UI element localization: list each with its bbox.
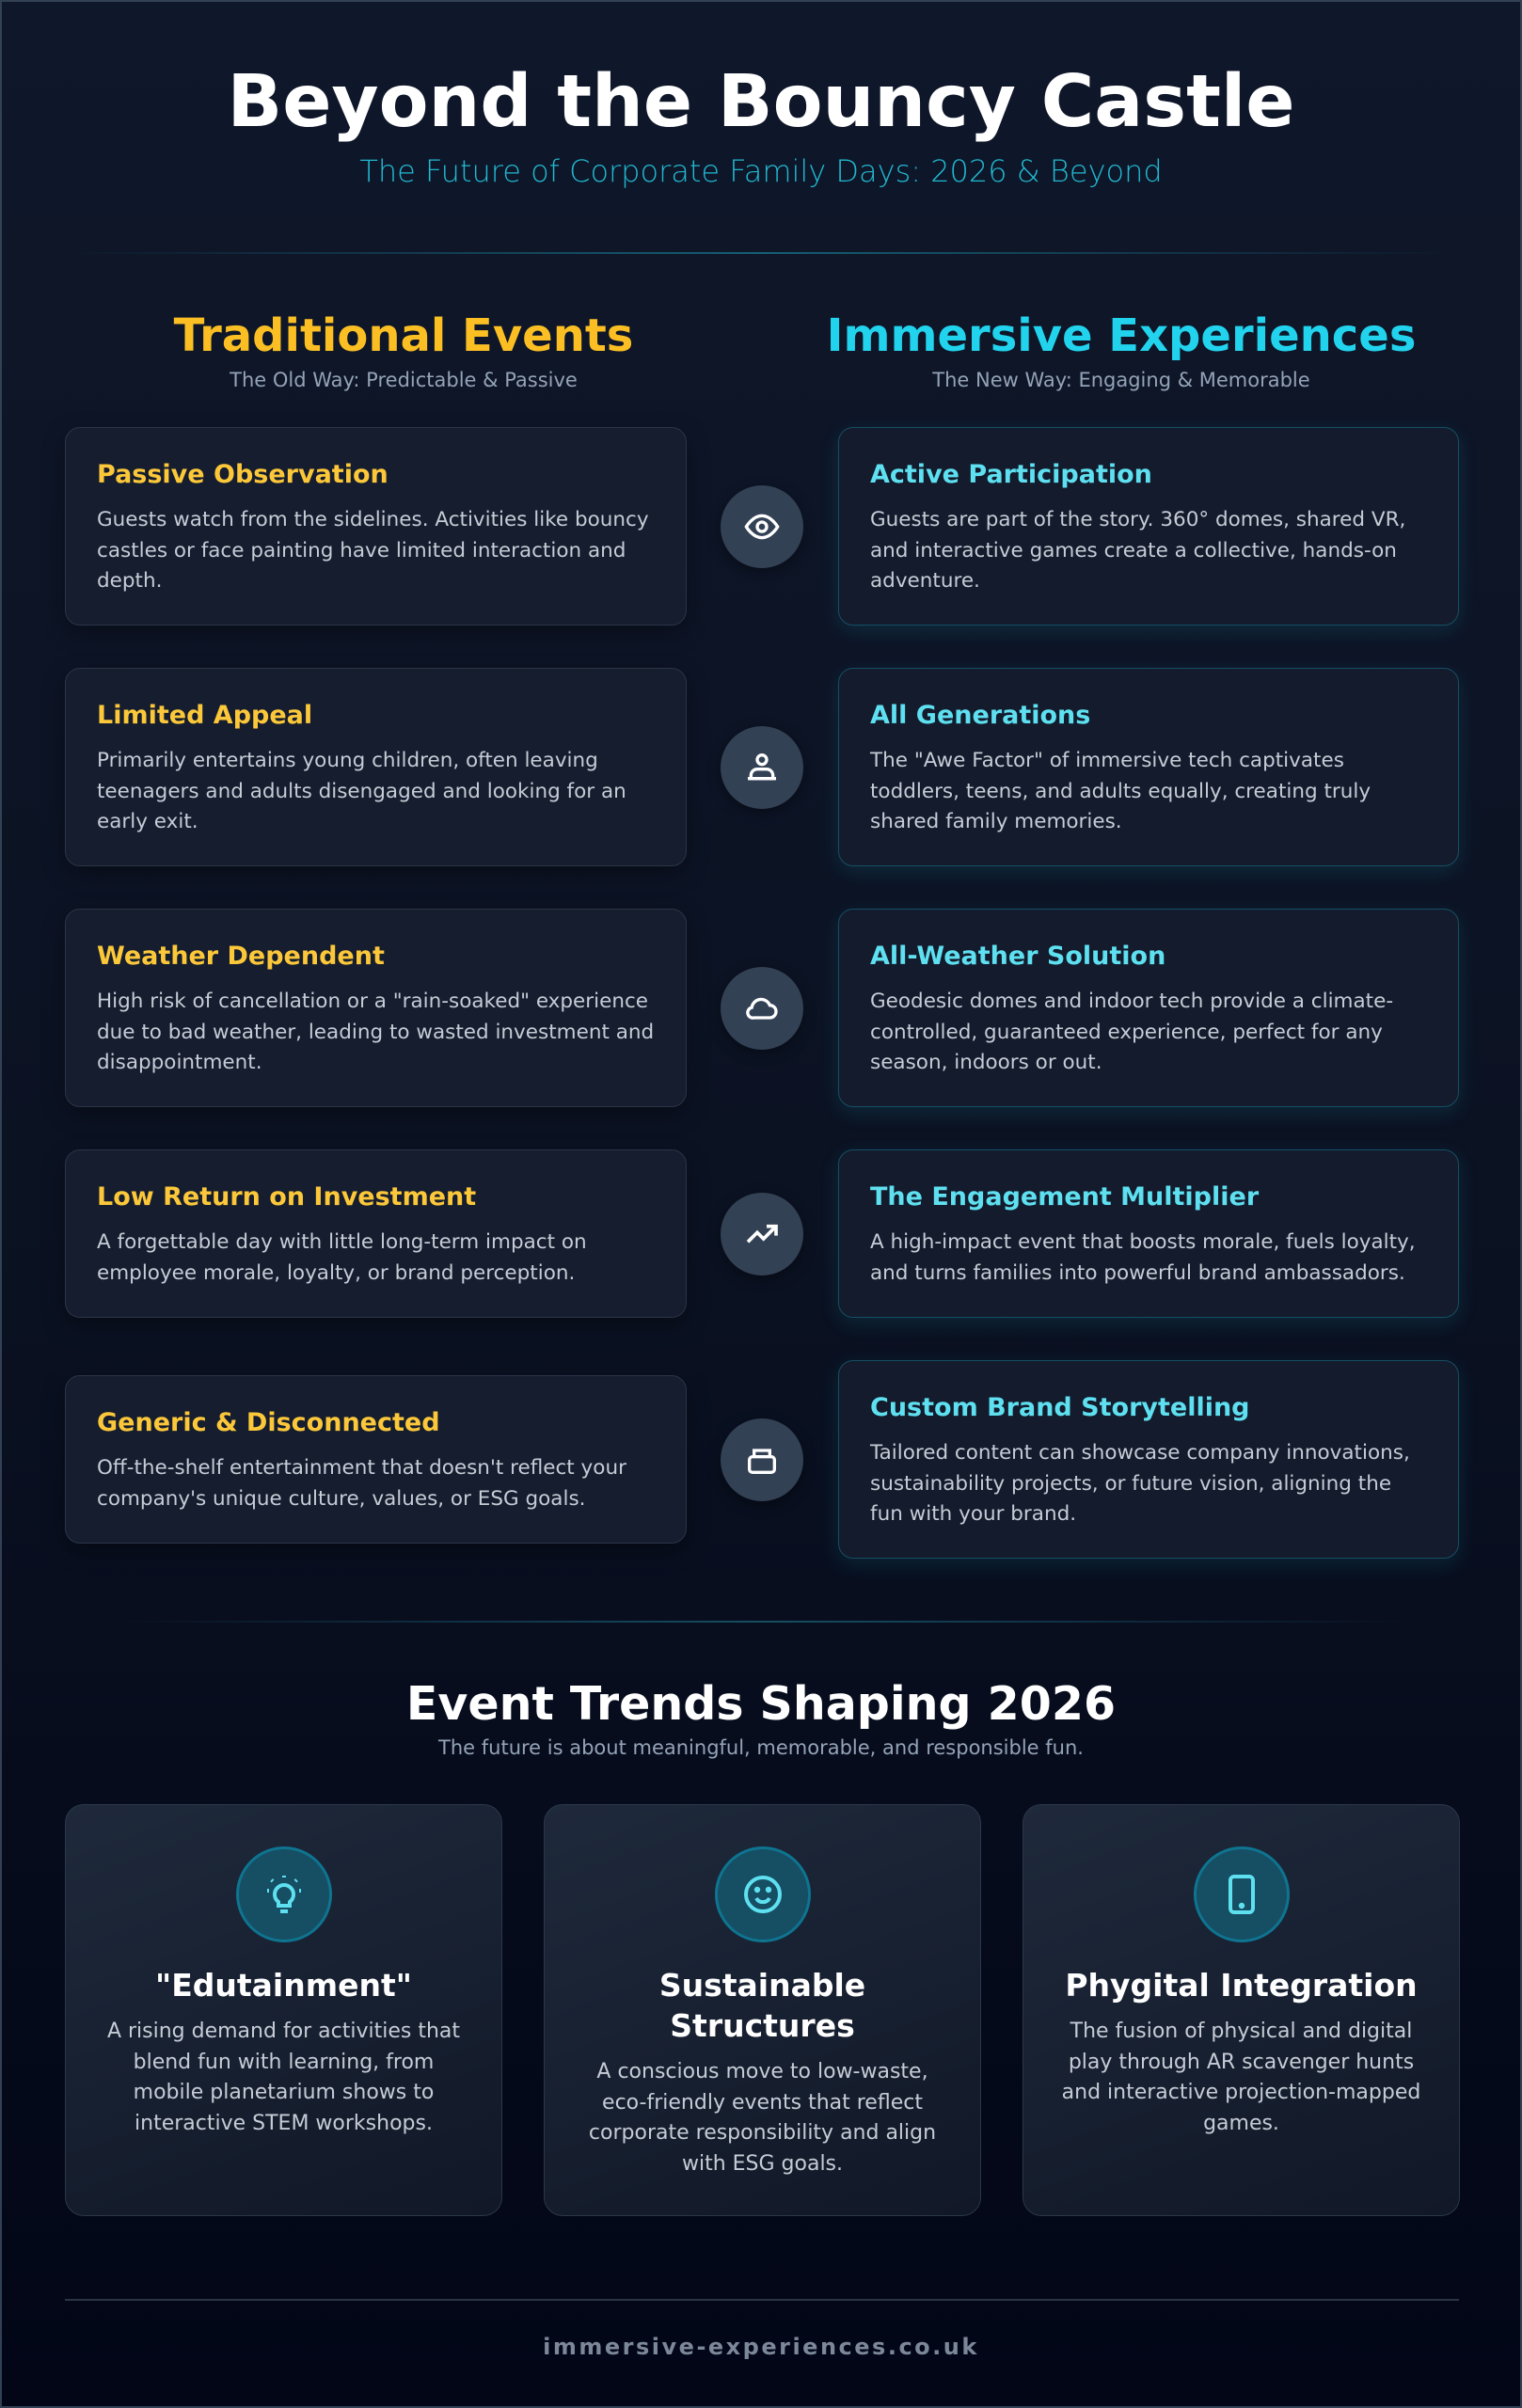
subtitle: The Future of Corporate Family Days: 2026 & Beyond bbox=[359, 153, 1163, 189]
heading: immersive: The New Way: Engaging & Memorable bbox=[932, 369, 1310, 391]
trends heading: Event Trends Shaping 2026 bbox=[406, 1677, 1116, 1731]
card: passive observation: Passive Observation bbox=[97, 460, 388, 489]
trend card: edutainment: "Edutainment" bbox=[155, 1967, 412, 2004]
card: passive observation: Guests watch from the sidelines. Activities like bouncy castles or face painting have limited interaction and depth. bbox=[97, 508, 649, 593]
card: all-weather bbox=[838, 909, 1459, 1107]
card: all generations bbox=[838, 668, 1459, 866]
card: all generations: The "Awe Factor" of immersive tech captivates toddlers, teens, and adults equally, creating truly shared family memories. bbox=[870, 749, 1371, 833]
card: weather dependent: High risk of cancellation or a "rain-soaked" experience due to bad weather, leading to wasted investment and disappointment. bbox=[97, 990, 654, 1074]
icon: trend bbox=[721, 1193, 803, 1275]
footer: immersive-experiences.co.uk bbox=[543, 2334, 979, 2360]
trend card: edutainment bbox=[65, 1804, 502, 2216]
heading: immersive: Immersive Experiences bbox=[827, 309, 1416, 362]
trend card: edutainment: A rising demand for activities that blend fun with learning, from mobile planetarium shows to interactive STEM workshops. bbox=[107, 2020, 460, 2135]
card: custom brand: Custom Brand Storytelling bbox=[870, 1393, 1250, 1422]
trend card: sustainable: A conscious move to low-waste, eco-friendly events that reflect corporate responsibility and align with ESG goals. bbox=[589, 2060, 936, 2175]
trend card: phygital: The fusion of physical and digital play through AR scavenger hunts and interactive projection-mapped games. bbox=[1062, 2020, 1420, 2135]
card: custom brand: Tailored content can showcase company innovations, sustainability projects, or future vision, aligning the fun with your brand. bbox=[870, 1441, 1410, 1526]
card: passive observation bbox=[65, 427, 687, 626]
icon: cloud bbox=[721, 967, 803, 1050]
card: weather dependent bbox=[65, 909, 687, 1107]
card: low ROI: A forgettable day with little long-term impact on employee morale, loyalty, or brand perception. bbox=[97, 1230, 587, 1285]
card: generic bbox=[65, 1375, 687, 1544]
card: engagement multiplier: The Engagement Multiplier bbox=[870, 1182, 1259, 1212]
icon: box bbox=[721, 1418, 803, 1501]
trend card: phygital: Phygital Integration bbox=[1065, 1967, 1418, 2004]
card: active participation bbox=[838, 427, 1459, 626]
icon: eye bbox=[721, 485, 803, 568]
trend card: sustainable: Sustainable Structures bbox=[659, 1967, 865, 2044]
card: all-weather: Geodesic domes and indoor tech provide a climate-controlled, guaranteed experience, perfect for any season, indoors or out. bbox=[870, 990, 1393, 1074]
trend card: phygital bbox=[1023, 1804, 1460, 2216]
card: engagement multiplier bbox=[838, 1149, 1459, 1318]
icon: people bbox=[721, 726, 803, 809]
card: low ROI: Low Return on Investment bbox=[97, 1182, 476, 1212]
card: generic: Generic & Disconnected bbox=[97, 1408, 440, 1437]
card: generic: Off-the-shelf entertainment that doesn't reflect your company's unique culture, values, or ESG goals. bbox=[97, 1456, 626, 1511]
trend card: sustainable bbox=[544, 1804, 981, 2216]
trends heading: The future is about meaningful, memorable, and responsible fun. bbox=[438, 1736, 1084, 1759]
card: all-weather: All-Weather Solution bbox=[870, 942, 1165, 971]
heading: traditional bbox=[173, 309, 633, 391]
card: active participation: Active Participation bbox=[870, 460, 1152, 489]
card: limited appeal: Primarily entertains young children, often leaving teenagers and adults disengaged and looking for an early exit. bbox=[97, 749, 626, 833]
card: all generations: All Generations bbox=[870, 701, 1090, 730]
card: limited appeal: Limited Appeal bbox=[97, 701, 312, 730]
card: engagement multiplier: A high-impact event that boosts morale, fuels loyalty, and turns families into powerful brand ambassadors. bbox=[870, 1230, 1416, 1285]
card: active participation: Guests are part of the story. 360° domes, shared VR, and interactive games create a collective, hands-on adventure. bbox=[870, 508, 1405, 593]
heading: immersive bbox=[827, 309, 1416, 391]
trends heading bbox=[406, 1677, 1116, 1759]
heading: traditional: Traditional Events bbox=[174, 309, 633, 362]
title: Beyond the Bouncy Castle bbox=[228, 60, 1294, 144]
card: limited appeal bbox=[65, 668, 687, 866]
card: custom brand bbox=[838, 1360, 1459, 1559]
heading: traditional: The Old Way: Predictable & Passive bbox=[230, 369, 578, 391]
card: low ROI bbox=[65, 1149, 687, 1318]
card: weather dependent: Weather Dependent bbox=[97, 942, 385, 971]
